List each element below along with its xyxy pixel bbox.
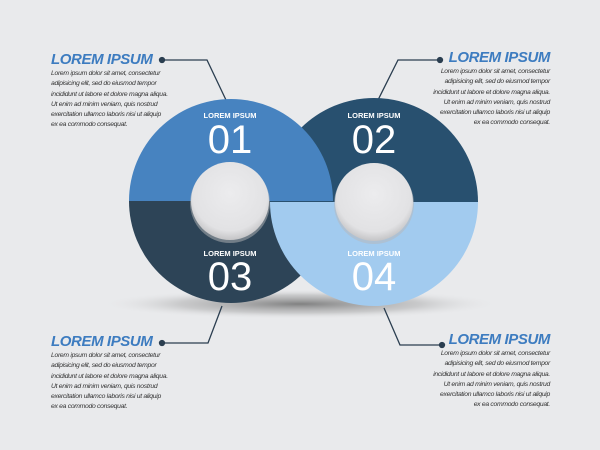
text block bottom-right: adipisicing elit, sed do eiusmod tempor xyxy=(445,360,550,367)
text block bottom-right: incididunt ut labore et dolore magna aliqua. xyxy=(433,371,550,378)
text block bottom-right: Ut enim ad minim veniam, quis nostrud xyxy=(444,381,550,388)
text block bottom-left: ex ea commodo consequat. xyxy=(51,403,127,410)
segment 04 xyxy=(270,202,478,306)
segment labels xyxy=(204,111,400,299)
text block bottom-left: LOREM IPSUM xyxy=(51,333,152,350)
text block bottom-right: Lorem ipsum dolor sit amet, consectetur xyxy=(441,350,550,357)
text block top-left: Lorem ipsum dolor sit amet, consectetur xyxy=(51,70,160,77)
text block top-right: exercitation ullamco laboris nisi ut aliquip xyxy=(440,109,550,116)
text block top-right: adipisicing elit, sed do eiusmod tempor xyxy=(445,78,550,85)
text block bottom-left: adipisicing elit, sed do eiusmod tempor xyxy=(51,362,156,369)
text block top-left xyxy=(51,51,168,128)
text block bottom-right xyxy=(433,331,551,408)
text block bottom-right: LOREM IPSUM xyxy=(449,331,550,348)
segment labels: LOREM IPSUM xyxy=(348,111,400,120)
text block bottom-right: ex ea commodo consequat. xyxy=(474,401,550,408)
text block top-right: Lorem ipsum dolor sit amet, consectetur xyxy=(441,68,550,75)
text block top-right: incididunt ut labore et dolore magna aliqua. xyxy=(433,89,550,96)
text block bottom-left: exercitation ullamco laboris nisi ut aliquip xyxy=(51,393,161,400)
text block top-right: LOREM IPSUM xyxy=(449,49,550,66)
shadow xyxy=(100,289,500,319)
text block top-left: adipisicing elit, sed do eiusmod tempor xyxy=(51,80,156,87)
text block top-left: incididunt ut labore et dolore magna aliqua. xyxy=(51,91,168,98)
text block top-right: ex ea commodo consequat. xyxy=(474,119,550,126)
text block bottom-left: Ut enim ad minim veniam, quis nostrud xyxy=(51,383,157,390)
segment 01 xyxy=(129,99,333,201)
segment labels: 01 xyxy=(208,118,252,162)
segment labels: LOREM IPSUM xyxy=(204,111,256,120)
segment labels: LOREM IPSUM xyxy=(348,249,400,258)
text block bottom-left: Lorem ipsum dolor sit amet, consectetur xyxy=(51,352,160,359)
text block top-left: Ut enim ad minim veniam, quis nostrud xyxy=(51,101,157,108)
text block bottom-left: incididunt ut labore et dolore magna aliqua. xyxy=(51,373,168,380)
leader lines xyxy=(160,58,444,348)
text block top-right xyxy=(433,49,551,126)
segment 02 xyxy=(270,98,478,202)
text block top-right: Ut enim ad minim veniam, quis nostrud xyxy=(444,99,550,106)
text block bottom-right: exercitation ullamco laboris nisi ut aliquip xyxy=(440,391,550,398)
segment labels: 03 xyxy=(208,255,252,299)
text block top-left: exercitation ullamco laboris nisi ut aliquip xyxy=(51,111,161,118)
segment labels: 02 xyxy=(352,118,396,162)
holes xyxy=(190,163,270,243)
segment 03 xyxy=(129,201,333,303)
text block bottom-left xyxy=(51,333,168,410)
text block top-left: ex ea commodo consequat. xyxy=(51,121,127,128)
segment labels: LOREM IPSUM xyxy=(204,249,256,258)
text block top-left: LOREM IPSUM xyxy=(51,51,152,68)
segment labels: 04 xyxy=(352,255,396,299)
